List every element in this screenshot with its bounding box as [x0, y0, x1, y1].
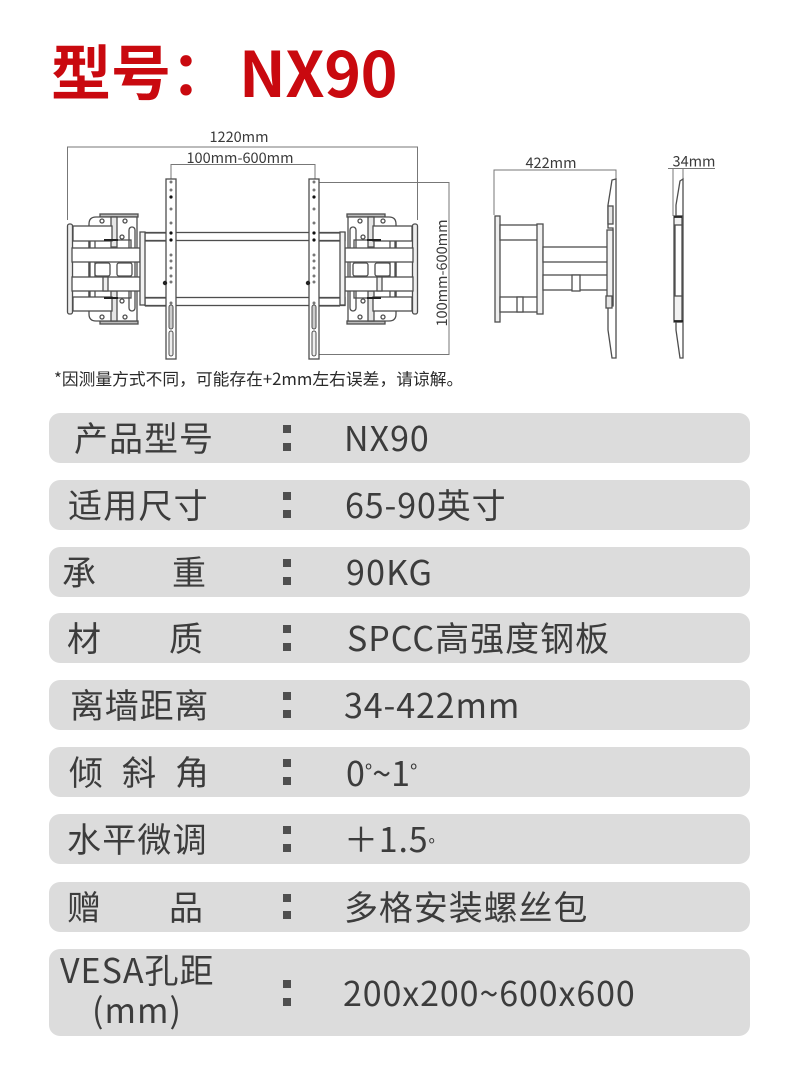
row: 赠品: 赠: [67, 881, 101, 930]
row: 材质: 材: [67, 612, 101, 661]
row: 水平微调: 水平微调: [67, 813, 208, 862]
row: 倾斜角: 0°~1°: [346, 747, 417, 796]
row: 适用尺寸: [49, 480, 750, 530]
row: 承重: 承: [62, 546, 96, 595]
row: 适用尺寸: 65-90英寸: [345, 479, 507, 528]
row: 赠品: [49, 882, 750, 932]
side view extended: [495, 179, 616, 358]
dimension: 100mm-600mm vertical: [319, 182, 452, 354]
row: 材质: SPCC高强度钢板: [347, 612, 610, 661]
dimension: 422mm: [494, 152, 616, 215]
dimension: 100mm-600mm horizontal: 100mm-600mm: [186, 147, 294, 168]
row: VESA孔距: [49, 949, 750, 1036]
row: 水平微调: [49, 814, 750, 864]
row: 产品型号: NX90: [344, 412, 430, 461]
row: 产品型号: [49, 413, 750, 463]
front view of wall mount: [68, 179, 418, 359]
horizontal rails: [145, 232, 345, 306]
left vertical plate: [166, 179, 176, 359]
row: 产品型号: 产品型号: [74, 412, 214, 461]
row: 赠品: 品: [169, 881, 203, 930]
measurement note: *因测量方式不同，可能存在+2mm左右误差，请谅解。: [54, 366, 463, 390]
dimension: 1220mm: [68, 126, 418, 220]
technical drawings: [66, 126, 715, 360]
dimension: 100mm-600mm horizontal: [171, 147, 315, 179]
row: 承重: 重: [172, 546, 206, 595]
dimension: 422mm: 422mm: [526, 152, 576, 173]
dimension: 1220mm: 1220mm: [209, 126, 269, 147]
row: 倾斜角: 斜: [122, 746, 156, 795]
side view folded: [674, 179, 683, 358]
row: VESA孔距: (mm): [92, 984, 182, 1033]
row: 离墙距离: 离墙距离: [70, 679, 209, 728]
row: 水平微调: ＋1.5°: [344, 813, 436, 862]
title: 型号：: [51, 26, 231, 113]
row: 倾斜角: [49, 747, 750, 797]
title: [51, 24, 397, 115]
row: 倾斜角: 倾: [69, 746, 103, 795]
right arm assembly: [319, 214, 418, 324]
row: VESA孔距: VESA孔距: [60, 944, 215, 993]
left arm assembly: [68, 214, 166, 324]
text: NX90: [239, 24, 397, 115]
row: 承重: [49, 547, 750, 597]
row: 承重: 90KG: [346, 546, 433, 595]
row: 倾斜角: 角: [175, 746, 209, 795]
row: 离墙距离: [49, 680, 750, 730]
row: 材质: 质: [169, 612, 203, 661]
dimension: 34mm: [668, 150, 715, 216]
row: 赠品: 多格安装螺丝包: [344, 881, 588, 930]
right vertical plate: [309, 179, 319, 359]
row: 离墙距离: 34-422mm: [344, 679, 520, 728]
row: VESA孔距: 200x200~600x600: [343, 967, 636, 1016]
dimension: 34mm: 34mm: [673, 150, 715, 172]
dimension: 100mm-600mm vertical: 100mm-600mm: [431, 219, 452, 327]
row: 材质: [49, 613, 750, 663]
row: 适用尺寸: 适用尺寸: [68, 479, 209, 528]
